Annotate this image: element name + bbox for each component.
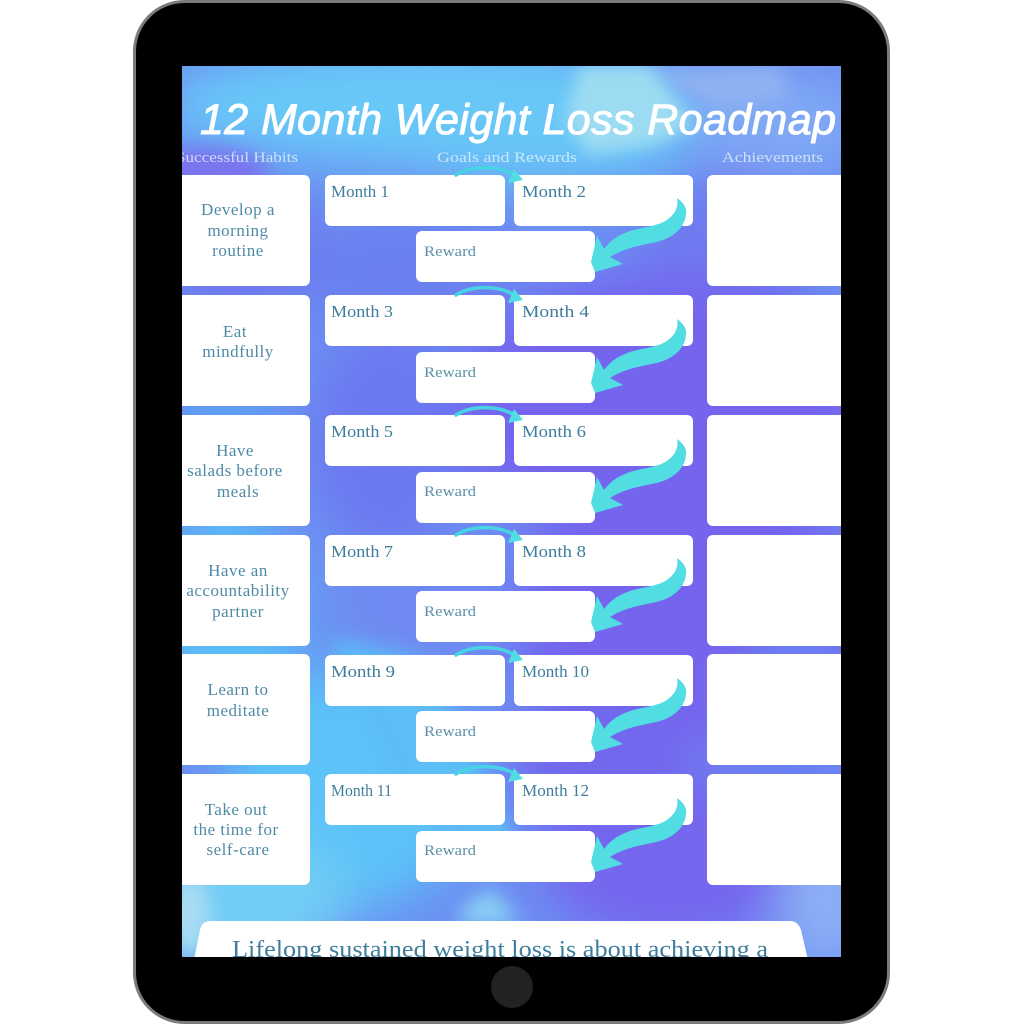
month 4 card: Month 4 [522, 302, 590, 321]
arrow: month 5 to month 6 [456, 408, 523, 423]
month 2 card [514, 175, 693, 226]
habit card 5 [170, 654, 310, 765]
row 2 [170, 288, 857, 406]
month 10 card [514, 655, 693, 706]
habit card 4: Have an [208, 561, 268, 580]
month 8 card [514, 535, 693, 586]
month 11 card: Month 11 [331, 781, 392, 800]
habit card 4 [170, 535, 310, 646]
arrow: month 3 to month 4 [456, 288, 523, 303]
habit card 4: partner [212, 602, 264, 621]
habit card 3: meals [217, 482, 259, 501]
achievement card [707, 654, 857, 765]
title: 12 Month Weight Loss Roadmap [200, 96, 836, 144]
arrow: month 1 to month 2 [456, 168, 523, 183]
habit card 3: salads before [187, 461, 283, 480]
reward card: Reward [424, 724, 477, 740]
month 11 card [325, 774, 505, 825]
arrow: month 4 to reward [591, 319, 686, 393]
month 1 card: Month 1 [331, 182, 389, 201]
month 4 card [514, 295, 693, 346]
message text: Lifelong sustained weight loss is about achieving a [232, 937, 768, 963]
month 7 card [325, 535, 505, 586]
screen [182, 66, 841, 957]
column heading: successful habits: Successful Habits [176, 150, 298, 166]
habit card 6: Take out [205, 800, 267, 819]
month 7 card: Month 7 [331, 542, 394, 561]
habit card 2: Eat [223, 322, 247, 341]
arrow: month 7 to month 8 [456, 528, 523, 543]
achievement card [707, 295, 841, 406]
row 5 [170, 648, 857, 765]
month 12 card: Month 12 [522, 781, 589, 800]
row 6 [170, 767, 857, 885]
habit card 5: Learn to [207, 680, 269, 699]
tablet body [134, 2, 888, 1022]
month 1 card [325, 175, 505, 226]
arrow: month 12 to reward [591, 798, 686, 872]
habit card 3 [170, 415, 310, 526]
habit card 3: Have [216, 441, 254, 460]
arrow: month 11 to month 12 [456, 767, 523, 782]
achievement card [707, 774, 857, 885]
habit card 6: self-care [206, 840, 270, 859]
month 6 card [514, 415, 693, 466]
month 12 card [514, 774, 693, 825]
achievement card [707, 415, 841, 526]
reward card [416, 231, 595, 282]
arrow: month 8 to reward [591, 558, 686, 632]
month 3 card [325, 295, 505, 346]
month 6 card: Month 6 [522, 422, 586, 441]
row 1 [170, 168, 857, 286]
reward card: Reward [424, 604, 477, 620]
reward card [416, 711, 595, 762]
month 9 card: Month 9 [331, 662, 395, 681]
habit card 6 [170, 774, 310, 885]
month 10 card: Month 10 [522, 662, 589, 681]
month 5 card: Month 5 [331, 422, 393, 441]
achievement card [707, 175, 841, 286]
reward card [416, 831, 595, 882]
habit card 6: the time for [193, 820, 279, 839]
habit card 1: morning [207, 221, 269, 240]
month 5 card [325, 415, 505, 466]
reward card: Reward [424, 244, 477, 260]
row 3 [170, 408, 857, 526]
habit card 4: accountability [186, 581, 290, 600]
reward card [416, 352, 595, 403]
reward card [416, 591, 595, 642]
habit card 1: Develop a [201, 200, 275, 219]
column heading: achievements: Achievements [722, 150, 823, 166]
habit card 1 [170, 175, 310, 286]
reward card: Reward [424, 365, 477, 381]
reward card: Reward [424, 484, 477, 500]
arrow: month 10 to reward [591, 678, 686, 752]
achievement card [707, 535, 841, 646]
arrow: month 2 to reward [591, 198, 686, 272]
arrow: month 6 to reward [591, 439, 686, 513]
habit card 5: meditate [207, 701, 269, 720]
month 8 card: Month 8 [522, 542, 586, 561]
reward card [416, 472, 595, 523]
habit card 2 [170, 295, 310, 406]
arrow: month 9 to month 10 [456, 648, 523, 663]
home button [491, 966, 533, 1008]
column heading: goals and rewards: Goals and Rewards [437, 150, 577, 166]
reward card: Reward [424, 843, 477, 859]
row 4 [170, 528, 857, 646]
bottom message card [194, 921, 808, 963]
month 2 card: Month 2 [522, 182, 586, 201]
habit card 1: routine [212, 241, 264, 260]
habit card 2: mindfully [202, 342, 274, 361]
watercolor background [182, 66, 841, 957]
month 9 card [325, 655, 505, 706]
month 3 card: Month 3 [331, 302, 393, 321]
